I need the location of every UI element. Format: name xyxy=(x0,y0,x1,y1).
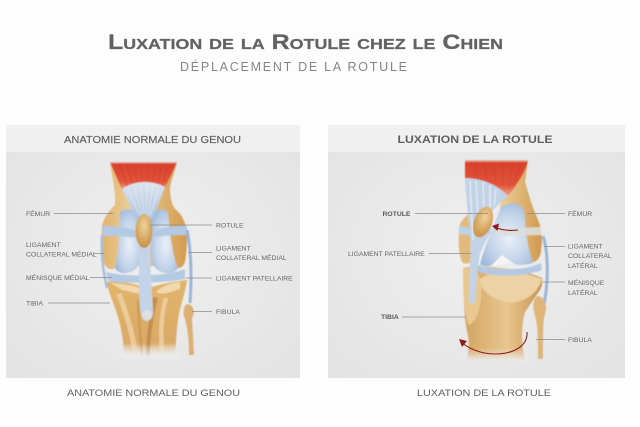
subtitle: DÉPLACEMENT DE LA ROTULE xyxy=(180,59,407,74)
label: ligament collatéral latéral: LIGAMENT xyxy=(568,244,603,250)
label: fibula: FIBULA xyxy=(216,309,240,316)
label: ligament collatéral latéral: COLLATERAL xyxy=(568,253,612,260)
title: Luxation de la Rotule chez le Chien xyxy=(108,31,503,54)
leader lines: luxated knee xyxy=(402,214,565,340)
illustration: luxated knee xyxy=(459,160,547,361)
illustration: normal knee xyxy=(102,162,194,358)
caption: normal anatomy: ANATOMIE NORMALE DU GENOU xyxy=(67,388,240,399)
panel: patellar luxation xyxy=(328,125,625,378)
label: ménisque médial: MÉNISQUE MÉDIAL xyxy=(26,273,90,282)
leader lines: normal knee xyxy=(48,214,212,312)
label: fémur: FÉMUR xyxy=(26,209,50,218)
caption: luxation: LUXATION DE LA ROTULE xyxy=(417,388,551,399)
label: ligament collatéral médial (left): COLLATERAL MÉDIAL xyxy=(26,250,97,258)
label: ménisque latéral: LATÉRAL xyxy=(568,288,598,297)
label: ligament patellaire: LIGAMENT PATELLAIRE xyxy=(216,276,293,282)
arrowhead: tibial rotation xyxy=(459,339,467,347)
panel: normal knee anatomy xyxy=(6,125,300,378)
label: rotule: ROTULE xyxy=(216,222,244,230)
label: ligament collatéral médial (left): LIGAMENT xyxy=(26,242,61,249)
label: tibia: TIBIA xyxy=(381,314,399,321)
label: ligament collatéral latéral: LATÉRAL xyxy=(568,261,598,270)
arrow: tibial rotation xyxy=(461,332,527,354)
panel heading: normal anatomy: ANATOMIE NORMALE DU GENOU xyxy=(64,134,241,146)
label: rotule: ROTULE xyxy=(382,211,411,218)
label: ligament collatéral médial (right): COLLATERAL MÉDIAL xyxy=(216,253,287,262)
label: fibula: FIBULA xyxy=(568,337,592,344)
arrow: patella displacement xyxy=(495,228,518,230)
label: fémur: FÉMUR xyxy=(568,209,592,218)
label: ménisque latéral: MÉNISQUE xyxy=(568,280,604,287)
panel heading: luxation: LUXATION DE LA ROTULE xyxy=(398,134,552,146)
label: tibia: TIBIA xyxy=(26,300,43,308)
label: ligament collatéral médial (right): LIGAMENT xyxy=(216,246,251,252)
arrowhead: patella displacement xyxy=(492,224,499,231)
label: ligament patellaire: LIGAMENT PATELLAIRE xyxy=(348,251,425,258)
